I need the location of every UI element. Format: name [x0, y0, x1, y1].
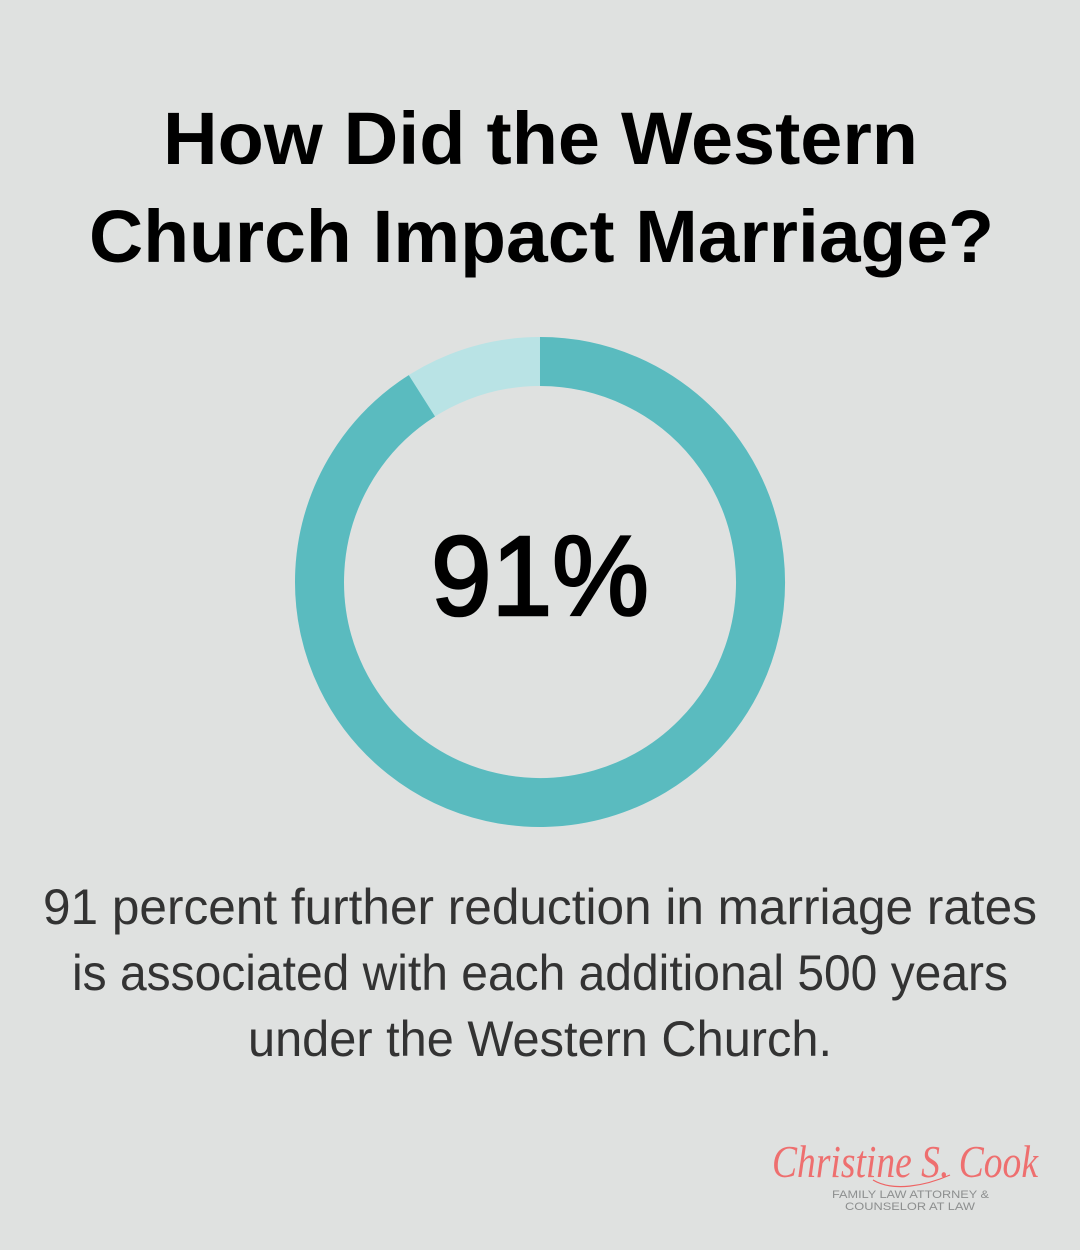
- donut chart: 91 percent: [320, 362, 761, 802]
- logo: Christine S. Cook: [772, 1136, 1039, 1213]
- description text: is associated with each additional 500 years: [72, 945, 1008, 1001]
- title: [89, 97, 994, 278]
- title: How Did the Western: [163, 97, 918, 180]
- logo tagline: COUNSELOR AT LAW: [845, 1201, 976, 1213]
- title: Church Impact Marriage?: [89, 195, 994, 278]
- description text: 91 percent further reduction in marriage rates: [43, 879, 1037, 935]
- donut value arc: 91 percent: [320, 362, 761, 802]
- donut centre value: 91%: [431, 513, 649, 639]
- logo swash: [873, 1175, 950, 1187]
- description text: under the Western Church.: [248, 1011, 832, 1067]
- description text: [43, 879, 1037, 1067]
- logo tagline: [832, 1189, 990, 1213]
- donut track: remaining 9 percent: [320, 362, 760, 802]
- logo tagline: FAMILY LAW ATTORNEY &: [832, 1189, 990, 1201]
